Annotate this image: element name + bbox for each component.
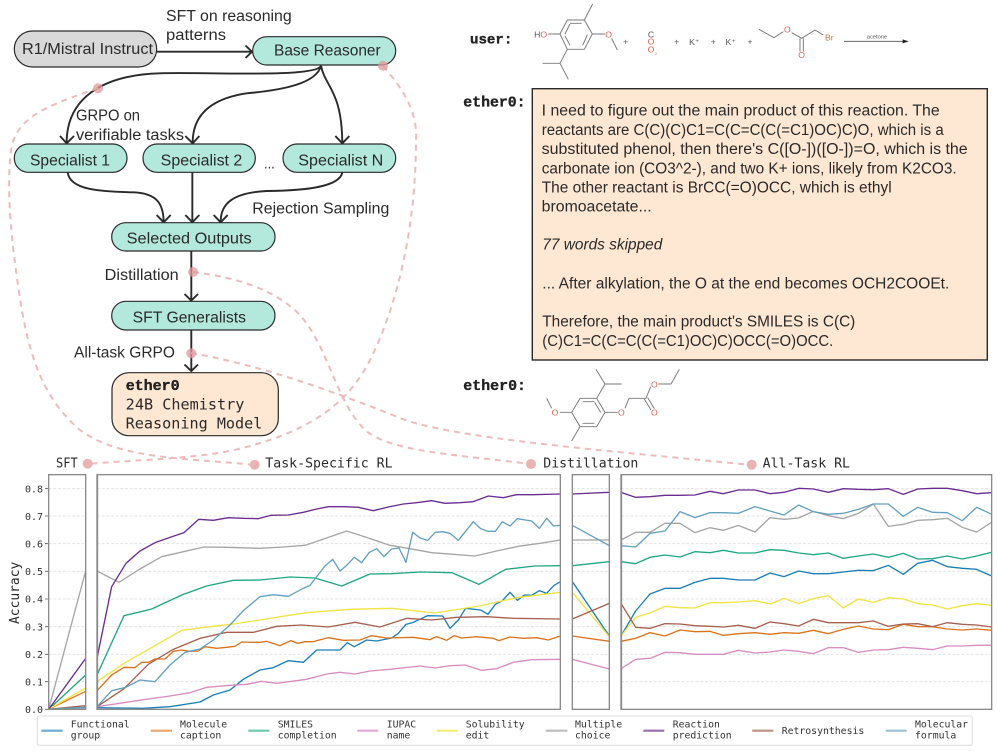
carbonate and potassium ions: +: [623, 37, 628, 47]
label: SFT on reasoning patterns: patterns: [166, 27, 226, 44]
label: GRPO on verifiable tasks: GRPO on: [76, 108, 140, 125]
molecule: product: O: [552, 408, 559, 418]
carbonate and potassium ions: +: [674, 37, 679, 47]
legend item: multiple choice: Multiple: [575, 719, 622, 730]
node: R1/Mistral Instruct: R1/Mistral Instruct: [22, 41, 154, 58]
plot area: lines in four phases: [45, 475, 992, 709]
node: Specialist 1: Specialist 1: [30, 152, 110, 169]
paragraph: reasoning start: substituted phenol, then there's C([O-])([O-])=O, which is the: [542, 141, 968, 158]
legend item: molecule caption: caption: [180, 731, 221, 742]
molecule: product: [547, 369, 679, 441]
y axis ticks: 0.1: [25, 678, 43, 688]
label: user: user:: [470, 32, 512, 48]
label: GRPO on verifiable tasks: [76, 108, 184, 144]
series: IUPAC name: [49, 645, 992, 709]
legend item: IUPAC name: [357, 719, 416, 742]
reaction arrow: acetone: [844, 35, 909, 43]
paragraph: conclusion: (C)C1=C(C=C(C(=C1)OC)C)OCC(=O)OCC.: [542, 333, 833, 350]
arrow: SFT Generalists to ether0: [184, 330, 198, 371]
molecule: substituted phenol: [534, 4, 617, 79]
legend item: functional group: group: [71, 731, 100, 742]
paragraph: conclusion: Therefore, the main product's SMILES is C(C): [542, 314, 855, 331]
legend item: IUPAC name: name: [387, 731, 410, 742]
series: molecular formula: [49, 504, 992, 709]
molecule: product: O: [651, 408, 658, 418]
y axis ticks: 0.7: [25, 512, 43, 523]
note: words skipped: 77 words skipped: [542, 237, 664, 254]
node: Specialist 2: Specialist 2: [161, 152, 242, 169]
paragraph: reasoning start: carbonate ion (CO3^2-), and two K+ ions, likely from K2CO3.: [542, 160, 957, 177]
y axis ticks: 0.3: [25, 622, 43, 633]
legend item: molecule caption: Molecule: [180, 719, 227, 730]
panel: ether0 reasoning text: [532, 89, 987, 360]
carbonate and potassium ions: 2: [655, 51, 658, 56]
node: Specialist N: Specialist N: [298, 152, 383, 169]
arrows: specialists to selected outputs: [68, 172, 342, 222]
phase labels: Distillation: [543, 457, 638, 472]
y axis ticks: 0.2: [25, 650, 43, 661]
carbonate and potassium ions: K⁺: [725, 37, 736, 47]
series: functional group: [49, 560, 992, 709]
node: ether0 model: ether0: [126, 378, 180, 395]
series: SMILES completion: [49, 550, 992, 709]
legend item: SMILES completion: SMILES: [278, 719, 313, 730]
legend item: molecular formula: Molecular: [915, 719, 968, 730]
label: SFT on reasoning patterns: [166, 8, 292, 44]
arrow: R1 to Base Reasoner: [157, 46, 252, 58]
molecule: substituted phenol: HO: [534, 30, 547, 40]
node: Specialist 2: [143, 144, 255, 172]
phase labels: SFT: [56, 457, 78, 472]
legend item: functional group: [41, 719, 130, 742]
molecule: ethyl bromoacetate: O: [784, 24, 791, 34]
phase labels: Task-Specific RL: [265, 457, 393, 472]
molecule: substituted phenol: O: [605, 30, 612, 40]
paragraph: reasoning start: The other reactant is BrCC(=O)OCC, which is ethyl: [542, 180, 892, 197]
molecule: product: O: [618, 408, 625, 418]
legend item: solubility edit: edit: [466, 731, 489, 742]
legend item: IUPAC name: IUPAC: [387, 719, 416, 730]
node: ether0 model: [112, 373, 278, 436]
reaction arrow: acetone: acetone: [867, 35, 887, 41]
series: solubility edit: [49, 592, 992, 709]
node: Specialist 1: [14, 144, 127, 172]
y axis ticks: 0.5: [25, 567, 43, 578]
series: multiple choice: [49, 504, 992, 709]
legend item: SMILES completion: [248, 719, 337, 742]
legend item: molecular formula: [886, 719, 968, 742]
flow diagram: training pipeline: [14, 8, 396, 436]
legend item: functional group: Functional: [71, 719, 130, 730]
node: Specialist N: [283, 144, 396, 172]
label: SFT on reasoning patterns: SFT on reasoning: [166, 8, 292, 25]
legend item: retrosynthesis: Retrosynthesis: [782, 726, 864, 737]
legend item: reaction prediction: [643, 719, 732, 742]
legend item: molecular formula: formula: [915, 731, 956, 742]
carbonate and potassium ions: K⁺: [689, 37, 700, 47]
node: R1/Mistral Instruct: [14, 31, 157, 67]
label: ether0 answer: ether0:: [463, 379, 526, 395]
node: ether0 model: 24B Chemistry: [126, 395, 244, 413]
panel frames: [49, 475, 992, 709]
dashed connectors: pipeline stages to chart phases: [9, 61, 752, 465]
node: SFT Generalists: [112, 301, 275, 330]
carbonate and potassium ions: [623, 29, 753, 56]
y axis ticks: 0.4: [25, 595, 43, 606]
series: reaction prediction: [49, 488, 992, 709]
paragraph: reasoning start: reactants are C(C)(C)C1=C(C=C(C(=C1)OC)C)O, which is a: [542, 122, 944, 139]
carbonate and potassium ions: O: [648, 45, 655, 55]
legend item: reaction prediction: Reaction: [673, 719, 720, 730]
legend: [37, 716, 972, 745]
node: Selected Outputs: Selected Outputs: [127, 230, 252, 247]
label: GRPO on verifiable tasks: verifiable tasks: [76, 127, 184, 144]
y axis ticks: 0.0: [25, 705, 43, 716]
carbonate and potassium ions: O: [648, 37, 655, 47]
legend item: solubility edit: Solubility: [466, 719, 525, 730]
y axis label: Accuracy: [8, 562, 23, 624]
paragraph: alkylation: ... After alkylation, the O at the end becomes OCH2COOEt.: [542, 275, 949, 292]
legend item: SMILES completion: completion: [278, 731, 337, 742]
carbonate and potassium ions: C: [648, 29, 654, 39]
reactants molecules and reaction arrow: [534, 4, 909, 79]
y axis ticks: 0.6: [25, 540, 43, 550]
carbonate and potassium ions: +: [747, 37, 753, 47]
molecule: product: O: [651, 379, 658, 389]
legend item: multiple choice: choice: [575, 731, 610, 742]
phase labels: [56, 457, 850, 472]
y axis ticks: [25, 484, 43, 716]
series: molecule caption: [49, 624, 992, 709]
legend item: molecule caption: [151, 719, 227, 742]
arrow: Selected Outputs to SFT Generalists: [184, 251, 198, 300]
label: All-task GRPO: All-task GRPO: [74, 344, 175, 361]
chart: accuracy by training phase: [8, 457, 992, 745]
legend item: reaction prediction: prediction: [673, 731, 732, 742]
ellipsis between specialists: ...: [264, 155, 275, 172]
molecule: ethyl bromoacetate: [759, 24, 834, 60]
paragraph: reasoning start: [542, 103, 968, 216]
molecule: ethyl bromoacetate: O: [798, 50, 805, 60]
legend item: multiple choice: [546, 719, 622, 742]
label: Distillation: Distillation: [105, 267, 179, 284]
label: Rejection Sampling: Rejection Sampling: [252, 200, 389, 217]
legend item: solubility edit: [437, 719, 525, 742]
y axis ticks: 0.8: [25, 484, 43, 495]
molecule: ethyl bromoacetate: Br: [825, 33, 834, 43]
carbonate and potassium ions: +: [711, 37, 716, 47]
arrows: Base Reasoner to specialists: [60, 66, 349, 143]
node: Base Reasoner: Base Reasoner: [274, 43, 381, 60]
node: Base Reasoner: [253, 37, 396, 65]
node: SFT Generalists: SFT Generalists: [133, 309, 246, 326]
paragraph: reasoning start: I need to figure out the main product of this reaction. The: [542, 103, 940, 120]
paragraph: reasoning start: bromoacetate...: [542, 199, 652, 216]
node: ether0 model: Reasoning Model: [126, 414, 262, 432]
label: ether0 reasoning: ether0:: [463, 96, 526, 112]
node: Selected Outputs: [112, 223, 275, 251]
series: retrosynthesis: [49, 603, 992, 709]
paragraph: conclusion: [542, 314, 855, 350]
phase labels: All-Task RL: [763, 457, 850, 472]
